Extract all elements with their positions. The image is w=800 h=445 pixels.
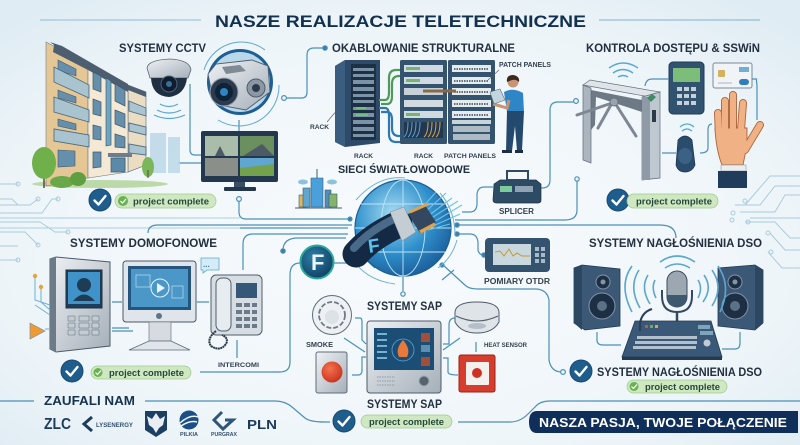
illustration: turnstile gate bbox=[577, 80, 660, 180]
icon: city skyline bbox=[295, 169, 342, 208]
icon: smoke detector bbox=[312, 296, 352, 334]
logo: lysenergy bbox=[84, 417, 134, 431]
logo: pilkia: PILKIA bbox=[180, 432, 198, 438]
logo: pilkia bbox=[180, 410, 198, 438]
label: rack left bbox=[310, 109, 338, 131]
illustration: apartment building bbox=[32, 39, 180, 188]
illustration: patch panel rack B bbox=[423, 60, 495, 144]
panel: zaufali nam bbox=[0, 393, 277, 438]
wires bbox=[344, 318, 476, 375]
status pill bbox=[115, 194, 216, 208]
logo: purgrax: PURGRAX bbox=[211, 432, 237, 438]
globe and fiber optic cable bbox=[352, 178, 462, 284]
check badge bbox=[89, 189, 111, 211]
label: heat sensor: HEAT SENSOR bbox=[484, 342, 527, 349]
icon: orange arrow bbox=[30, 323, 45, 339]
wires left of panel bbox=[33, 274, 50, 329]
banner: slogan bbox=[529, 411, 798, 433]
status pill: project complete bbox=[645, 382, 720, 393]
icon: manual call point bbox=[459, 355, 495, 392]
icon: key fob bbox=[676, 124, 695, 172]
logo: lysenergy: LYSENERGY bbox=[96, 422, 134, 429]
rack labels row: RACK bbox=[354, 153, 373, 160]
panel: systemy SAP bbox=[306, 296, 527, 432]
icon: keypad bbox=[669, 62, 704, 114]
icon: speech bubble bbox=[201, 258, 219, 273]
title: NASZE REALIZACJE TELETECHNICZNE bbox=[215, 12, 586, 31]
heading: zaufali nam: ZAUFALI NAM bbox=[44, 393, 135, 408]
icon: large bullet camera bbox=[204, 42, 279, 126]
check badge bbox=[570, 360, 592, 382]
rack labels row: RACK bbox=[414, 153, 433, 160]
status pill bbox=[91, 366, 191, 379]
illustration: SAP control panel bbox=[367, 321, 441, 393]
label: intercom: INTERCOMI bbox=[218, 362, 259, 369]
panel: systemy nagłośnienia DSO bbox=[570, 237, 763, 393]
illustration: video monitor bbox=[123, 261, 196, 350]
cables: green and blue bbox=[379, 70, 402, 142]
heading: zaufali nam bbox=[0, 393, 135, 408]
icon: left speaker bbox=[574, 265, 620, 330]
logo: eagle crest bbox=[145, 411, 167, 437]
label: smoke: SMOKE bbox=[306, 340, 333, 349]
icon: fusion splicer: SPLICER bbox=[499, 207, 534, 216]
panel: systemy domofonowe bbox=[30, 238, 262, 382]
status pill: project complete bbox=[133, 196, 209, 208]
banner: slogan: NASZA PASJA, TWOJE POŁĄCZENIE bbox=[539, 415, 787, 430]
logo: ZLC: ZLC bbox=[44, 416, 71, 433]
repeated heading: SYSTEMY NAGŁOŚNIENIA DSO bbox=[597, 366, 762, 379]
heading: sieci światłowodowe: SIECI ŚWIATŁOWODOWE bbox=[338, 163, 470, 176]
label: patch panels callout: PATCH PANELS bbox=[499, 62, 551, 69]
icon: CCTV monitor with four feeds bbox=[201, 131, 278, 191]
heading: systemy CCTV: SYSTEMY CCTV bbox=[119, 43, 206, 55]
heading: okablowanie strukturalne: OKABLOWANIE STRUKTURALNE bbox=[332, 43, 515, 55]
status pill: project complete bbox=[369, 417, 444, 428]
check badge bbox=[607, 189, 629, 211]
rack labels row: PATCH PANELS bbox=[444, 153, 497, 160]
status pill: project complete bbox=[109, 368, 184, 379]
status pill bbox=[627, 380, 727, 393]
icon: OTDR meter bbox=[485, 238, 550, 272]
illustration: mixing console bbox=[622, 309, 722, 360]
icon: wifi over turnstile bbox=[609, 63, 638, 77]
logo: PLN: PLN bbox=[247, 417, 277, 432]
status pill bbox=[627, 194, 718, 208]
logo: purgrax bbox=[211, 412, 237, 438]
icon: access card bbox=[713, 63, 752, 88]
heading: kontrola dostępu: KONTROLA DOSTĘPU & SSWiN bbox=[586, 43, 760, 55]
heading: systemy SAP bottom: SYSTEMY SAP bbox=[367, 399, 442, 411]
heading: nagłośnienia: SYSTEMY NAGŁOŚNIENIA DSO bbox=[589, 237, 762, 250]
label: intercom bbox=[218, 340, 259, 369]
icon: F logo badge bbox=[300, 246, 334, 278]
icon: fusion splicer bbox=[493, 171, 541, 216]
icon: studio microphone bbox=[662, 271, 692, 330]
illustration: server rack bbox=[335, 60, 380, 147]
label: patch panels callout bbox=[488, 62, 551, 80]
panel: sieci światłowodowe bbox=[295, 163, 550, 286]
icon: heat sensor bbox=[455, 302, 499, 333]
icon: palm hand bbox=[715, 95, 760, 188]
check badge bbox=[333, 410, 355, 432]
rack labels row bbox=[354, 153, 497, 160]
label: pomiary OTDR: POMIARY OTDR bbox=[484, 277, 550, 286]
icon: dome camera bbox=[147, 59, 191, 118]
heading: systemy domofonowe: SYSTEMY DOMOFONOWE bbox=[70, 238, 217, 250]
panel: kontrola dostępu bbox=[577, 43, 760, 211]
illustration: patch panel rack A bbox=[400, 60, 447, 144]
illustration: door entry panel bbox=[50, 257, 110, 352]
icon: red push button bbox=[316, 352, 347, 393]
icon: speech bubble: ... bbox=[203, 260, 210, 269]
illustration: technician with tablet bbox=[490, 75, 524, 153]
icon: right speaker bbox=[718, 265, 763, 330]
background circuit traces bbox=[0, 176, 800, 268]
heading: systemy SAP top: SYSTEMY SAP bbox=[367, 301, 442, 313]
icon: F logo badge: F bbox=[311, 250, 324, 275]
check badge bbox=[61, 360, 83, 382]
globe and fiber optic cable: F bbox=[367, 235, 381, 258]
icon: sound waves bbox=[625, 256, 726, 312]
panel: systemy CCTV bbox=[32, 39, 279, 211]
panel: okablowanie strukturalne bbox=[310, 43, 551, 160]
access wires bbox=[645, 79, 757, 153]
icon: intercom phone bbox=[209, 275, 262, 349]
label: rack left: RACK bbox=[310, 124, 329, 131]
arrows bbox=[112, 302, 209, 331]
status pill: project complete bbox=[636, 196, 712, 208]
